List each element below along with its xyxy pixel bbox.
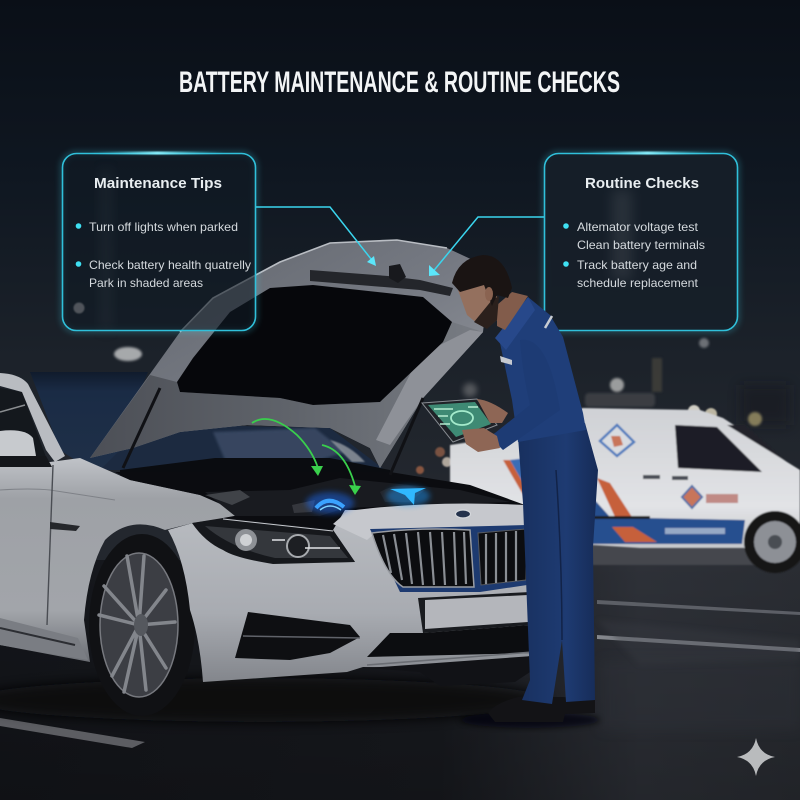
car xyxy=(0,372,535,716)
van windows xyxy=(675,425,762,472)
bonnet latch strip xyxy=(310,270,453,296)
headlight xyxy=(192,518,355,564)
mirror xyxy=(0,430,36,456)
side window xyxy=(0,388,46,457)
open bonnet xyxy=(90,240,490,475)
arrow glow and green arrows xyxy=(252,419,430,514)
tip bullets: Check battery health quatrelly xyxy=(89,258,251,272)
latch xyxy=(389,264,406,283)
icon: sparkle xyxy=(737,738,775,776)
check bullets: Altemator voltage test xyxy=(577,220,699,234)
door line xyxy=(47,465,53,625)
door handles xyxy=(643,475,688,480)
bonnet shell xyxy=(90,240,490,468)
engine bay xyxy=(115,472,525,530)
green arrowheads xyxy=(311,466,361,495)
chest pocket xyxy=(500,356,512,365)
front bumper xyxy=(168,510,535,682)
bonnet struts xyxy=(123,388,423,475)
lower air intake xyxy=(235,612,360,660)
van logo xyxy=(600,425,634,456)
torso xyxy=(500,297,586,442)
tip bullets: Park in shaded areas xyxy=(89,276,203,290)
lower bumper xyxy=(367,625,533,657)
bonnet nose xyxy=(333,503,525,540)
van blue stripe xyxy=(590,517,745,544)
blue grille surround xyxy=(370,525,527,592)
check bullets: Track battery age and xyxy=(577,258,697,272)
badge xyxy=(456,510,470,518)
tip bullets: Turn off lights when parked xyxy=(89,220,238,234)
van wheel xyxy=(744,511,800,573)
wheel xyxy=(89,534,195,716)
bonnet shaded lower edge xyxy=(90,322,483,468)
heading: Maintenance Tips xyxy=(94,175,222,192)
battery glow xyxy=(306,486,430,514)
tip bullets xyxy=(74,220,251,314)
left connector xyxy=(256,207,376,266)
right connector xyxy=(429,217,544,276)
collar xyxy=(495,297,535,350)
panel: maintenance tips xyxy=(62,152,256,331)
van orange stripes xyxy=(597,478,632,517)
side vent xyxy=(50,522,80,531)
neck and head xyxy=(452,255,528,330)
tablet xyxy=(422,399,497,442)
mechanic xyxy=(422,255,598,722)
spokes xyxy=(99,556,175,692)
car pillar and roof xyxy=(0,373,65,462)
shoes xyxy=(488,697,595,722)
side body xyxy=(0,458,245,662)
road surface xyxy=(0,543,800,800)
van body xyxy=(450,408,800,548)
sleeve xyxy=(490,340,560,450)
bonnet inner opening xyxy=(177,285,452,405)
cowl wiper xyxy=(120,458,392,480)
service van xyxy=(450,408,800,573)
grille xyxy=(372,529,526,587)
heading: Routine Checks xyxy=(585,175,699,192)
hands xyxy=(477,399,508,423)
check bullets: Clean battery terminals xyxy=(577,238,705,252)
van door logo xyxy=(682,486,702,508)
windshield xyxy=(30,372,148,470)
licence plate xyxy=(418,592,530,633)
check bullets: schedule replacement xyxy=(577,276,699,290)
panel: routine checks xyxy=(544,152,738,331)
legs xyxy=(518,423,598,704)
connector lines and arrows xyxy=(256,207,544,276)
green arrow lines xyxy=(252,419,355,486)
shoulder stripe xyxy=(545,316,552,328)
check bullets xyxy=(563,220,705,290)
